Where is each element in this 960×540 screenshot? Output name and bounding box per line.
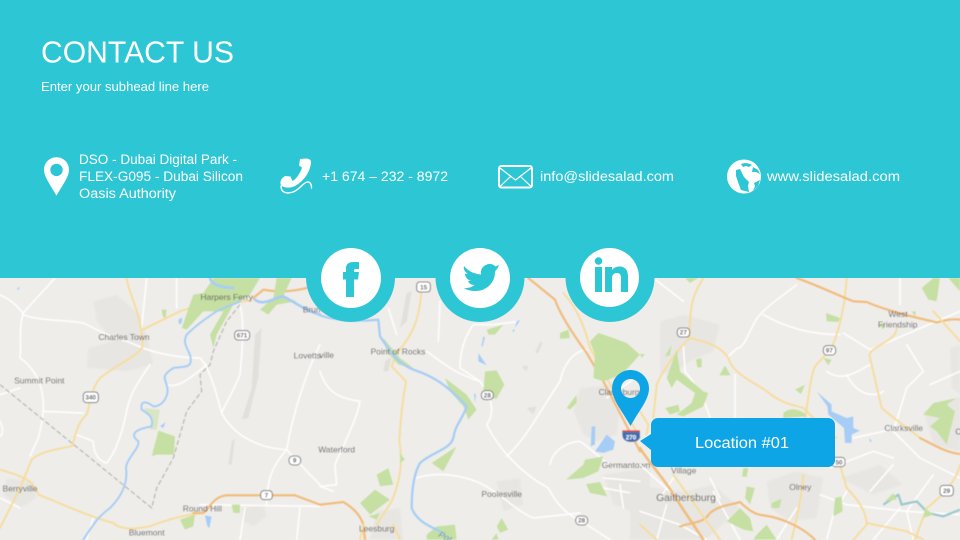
map background: Round Hill [183, 504, 222, 514]
contact: website [727, 160, 900, 194]
contact: address [44, 152, 243, 201]
map background: 28 [578, 518, 586, 525]
map background: 50 [835, 459, 843, 466]
map background: 27 [680, 330, 687, 337]
location callout [640, 418, 835, 467]
map background: Brun [303, 304, 321, 314]
map background: Berryville [3, 483, 38, 493]
map background: Summit Point [14, 375, 65, 385]
map background: Lovetts [294, 350, 321, 360]
icon: envelope [499, 166, 532, 188]
website address: www.slidesalad.com [766, 169, 900, 184]
map background: 9 [293, 458, 297, 465]
contact: email [499, 166, 674, 188]
address text: DSO - Dubai Digital Park - [79, 152, 237, 167]
contact: phone [280, 158, 448, 193]
icon: f [343, 262, 359, 297]
map background: Bluemont [129, 528, 165, 538]
icon: globe [727, 160, 761, 194]
email address: info@slidesalad.com [540, 169, 674, 184]
social: facebook [306, 233, 395, 322]
map background: Waterford [318, 445, 355, 455]
map background: 97 [826, 348, 833, 355]
map background: Charles Town [98, 332, 150, 342]
map background [0, 270, 960, 540]
phone number: +1 674 – 232 - 8972 [322, 169, 448, 184]
subhead: Enter your subhead line here [41, 80, 209, 94]
top panel [0, 0, 960, 278]
map background: Gaithersburg [656, 493, 716, 504]
map background: Olney [789, 482, 812, 492]
map background: 15 [420, 284, 428, 291]
map background: ville [319, 350, 334, 360]
social: linkedin [566, 233, 654, 322]
callout label: Location #01 [695, 435, 789, 452]
map background: Leesburg [359, 523, 395, 533]
map background: Friendship [878, 319, 918, 329]
social: twitter [436, 233, 524, 322]
map background: 29 [943, 488, 951, 495]
address text: FLEX-G095 - Dubai Silicon [79, 169, 243, 184]
map background: Village [671, 466, 697, 476]
address text: Oasis Authority [79, 186, 176, 201]
map background: Poolesville [481, 489, 522, 499]
icon: location pin [44, 157, 69, 196]
location pin marker [612, 370, 649, 426]
map background: West [888, 309, 908, 319]
icon: telephone [280, 158, 312, 193]
map background: Point of Rocks [371, 346, 425, 356]
title: CONTACT US [41, 34, 234, 70]
map background: 7 [265, 492, 269, 499]
map background: 270 [626, 435, 637, 442]
map background: 28 [484, 392, 491, 399]
map background: Clarksville [884, 423, 923, 433]
map background: 340 [85, 395, 96, 402]
icon: in [595, 257, 628, 292]
icon: bird [464, 264, 499, 291]
map background: Germantown [602, 460, 651, 470]
map background: Harpers Ferry [201, 292, 254, 302]
map background: 671 [237, 333, 248, 340]
map background: Clarksburg [598, 387, 640, 397]
